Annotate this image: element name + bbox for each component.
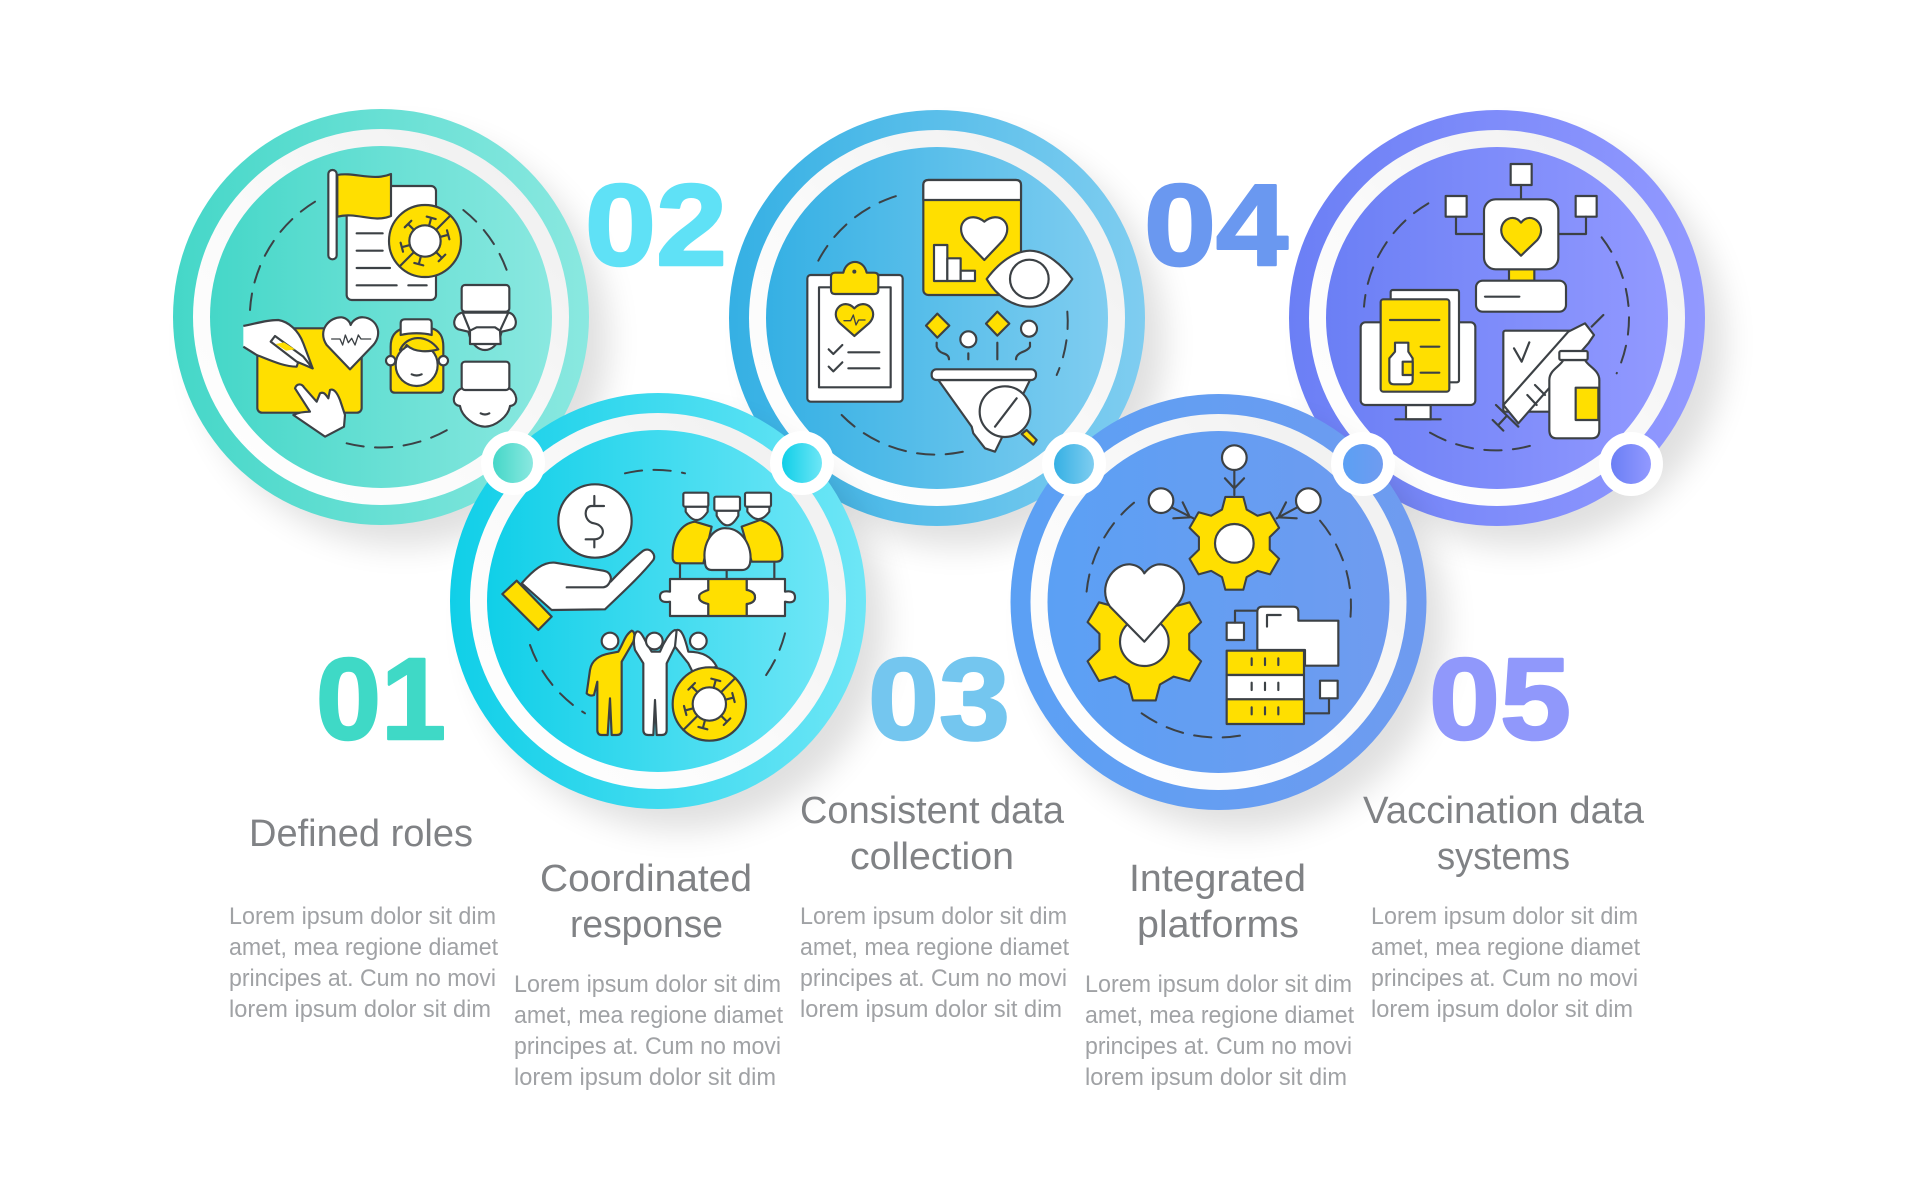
text block: defined roles: Lorem ipsum dolor sit dim	[229, 903, 496, 930]
step 4 circle: integrated platforms	[1010, 394, 1446, 831]
text block: vaccination data systems: lorem ipsum dolor sit dim	[1371, 996, 1633, 1023]
text block: defined roles: amet, mea regione diamet	[229, 934, 498, 961]
step 3 circle: consistent data collection	[729, 110, 1165, 547]
text block: vaccination data systems: Vaccination data	[1363, 790, 1645, 832]
text block: coordinated response: Lorem ipsum dolor sit dim	[514, 971, 781, 998]
text block: consistent data collection: lorem ipsum dolor sit dim	[800, 996, 1062, 1023]
text block: vaccination data systems: principes at. Cum no movi	[1371, 965, 1638, 992]
number 01: 01	[316, 634, 446, 764]
text block: integrated platforms	[1085, 858, 1354, 1091]
text block: coordinated response	[514, 858, 783, 1091]
text block: consistent data collection: principes at. Cum no movi	[800, 965, 1067, 992]
text block: integrated platforms: amet, mea regione diamet	[1085, 1002, 1354, 1029]
text block: integrated platforms: Integrated	[1129, 858, 1306, 900]
number 05: 05	[1429, 634, 1571, 764]
text block: consistent data collection	[800, 790, 1069, 1023]
step 5 circle: vaccination data systems	[1289, 110, 1725, 547]
step 1 circle: defined roles	[173, 109, 609, 546]
text block: integrated platforms: platforms	[1137, 904, 1299, 946]
text block: integrated platforms: lorem ipsum dolor sit dim	[1085, 1064, 1347, 1091]
text block: defined roles	[229, 813, 498, 1023]
connector dots	[481, 431, 1663, 496]
number 02: 02	[585, 160, 727, 290]
number 04: 04	[1144, 160, 1288, 290]
text block: coordinated response: amet, mea regione diamet	[514, 1002, 783, 1029]
text block: vaccination data systems: Lorem ipsum dolor sit dim	[1371, 903, 1638, 930]
text block: coordinated response: principes at. Cum no movi	[514, 1033, 781, 1060]
text block: vaccination data systems: systems	[1437, 836, 1570, 878]
text block: consistent data collection: Consistent data	[800, 790, 1065, 832]
text block: coordinated response: Coordinated	[540, 858, 752, 900]
text block: consistent data collection: collection	[850, 836, 1014, 878]
step 2 circle: coordinated response	[450, 393, 886, 830]
text block: defined roles: principes at. Cum no movi	[229, 965, 496, 992]
text block: coordinated response: lorem ipsum dolor sit dim	[514, 1064, 776, 1091]
text block: vaccination data systems	[1363, 790, 1645, 1023]
text block: consistent data collection: amet, mea regione diamet	[800, 934, 1069, 961]
text block: defined roles: Defined roles	[249, 813, 473, 855]
text block: vaccination data systems: amet, mea regione diamet	[1371, 934, 1640, 961]
text block: coordinated response: response	[570, 904, 723, 946]
text block: integrated platforms: Lorem ipsum dolor sit dim	[1085, 971, 1352, 998]
number 03: 03	[868, 634, 1010, 764]
text block: consistent data collection: Lorem ipsum dolor sit dim	[800, 903, 1067, 930]
text block: integrated platforms: principes at. Cum no movi	[1085, 1033, 1352, 1060]
text block: defined roles: lorem ipsum dolor sit dim	[229, 996, 491, 1023]
